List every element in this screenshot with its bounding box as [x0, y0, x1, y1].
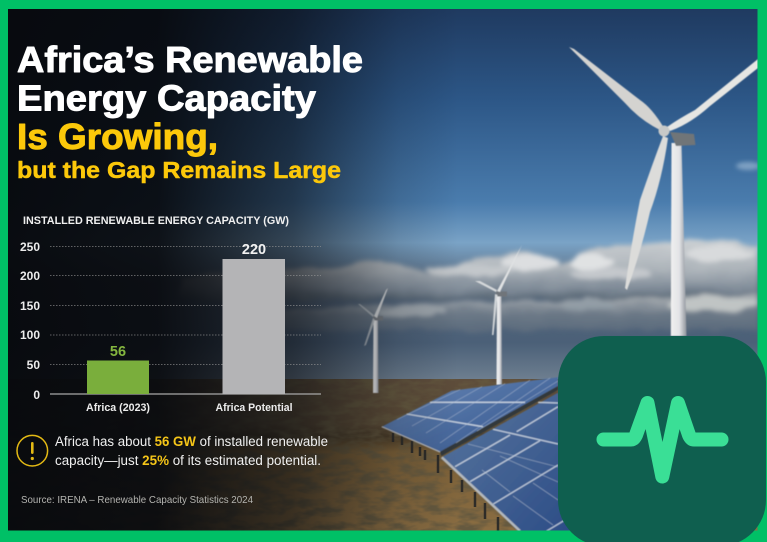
bar: Africa 2023	[86, 344, 150, 414]
solar panel array rear	[382, 377, 558, 456]
callout text: Africa has about 56 GW of installed renewable	[55, 434, 328, 449]
small turbine left	[358, 288, 388, 393]
dark left overlay	[8, 9, 440, 530]
y axis labels: 50	[27, 358, 40, 372]
source note: Source: IRENA – Renewable Capacity Statistics 2024	[21, 494, 253, 506]
icon: app badge with pulse line	[558, 336, 766, 542]
small cloud wisp	[736, 162, 760, 170]
title: but the Gap Remains Large	[17, 157, 341, 183]
bar: Africa 2023: Africa (2023)	[86, 402, 150, 414]
y axis labels: 0	[33, 388, 40, 402]
bar: Africa Potential	[216, 242, 292, 414]
panel supports	[393, 433, 498, 531]
callout text: capacity—just 25% of its estimated potential.	[55, 453, 321, 468]
bar chart	[20, 215, 321, 414]
title: Africa’s Renewable	[17, 39, 363, 80]
y axis labels: 250	[20, 240, 40, 254]
callout text	[55, 434, 328, 468]
y axis labels	[20, 240, 40, 402]
title: Is Growing,	[17, 116, 218, 157]
sky	[158, 9, 758, 379]
clouds	[180, 240, 765, 330]
large turbine	[569, 47, 758, 336]
title: Energy Capacity	[17, 78, 316, 118]
y axis labels: 200	[20, 269, 40, 283]
title	[17, 39, 363, 183]
bar: Africa Potential: Africa Potential	[216, 402, 292, 414]
small turbine middle	[475, 245, 522, 385]
bar: Africa Potential: 220	[242, 242, 266, 258]
bar: Africa 2023: 56	[110, 344, 126, 360]
ground	[158, 379, 758, 530]
icon: warning circle	[17, 435, 48, 466]
y axis labels: 150	[20, 299, 40, 313]
y axis labels: 100	[20, 328, 40, 342]
solar panel array front	[442, 393, 572, 535]
chart heading: INSTALLED RENEWABLE ENERGY CAPACITY (GW)	[23, 215, 289, 227]
